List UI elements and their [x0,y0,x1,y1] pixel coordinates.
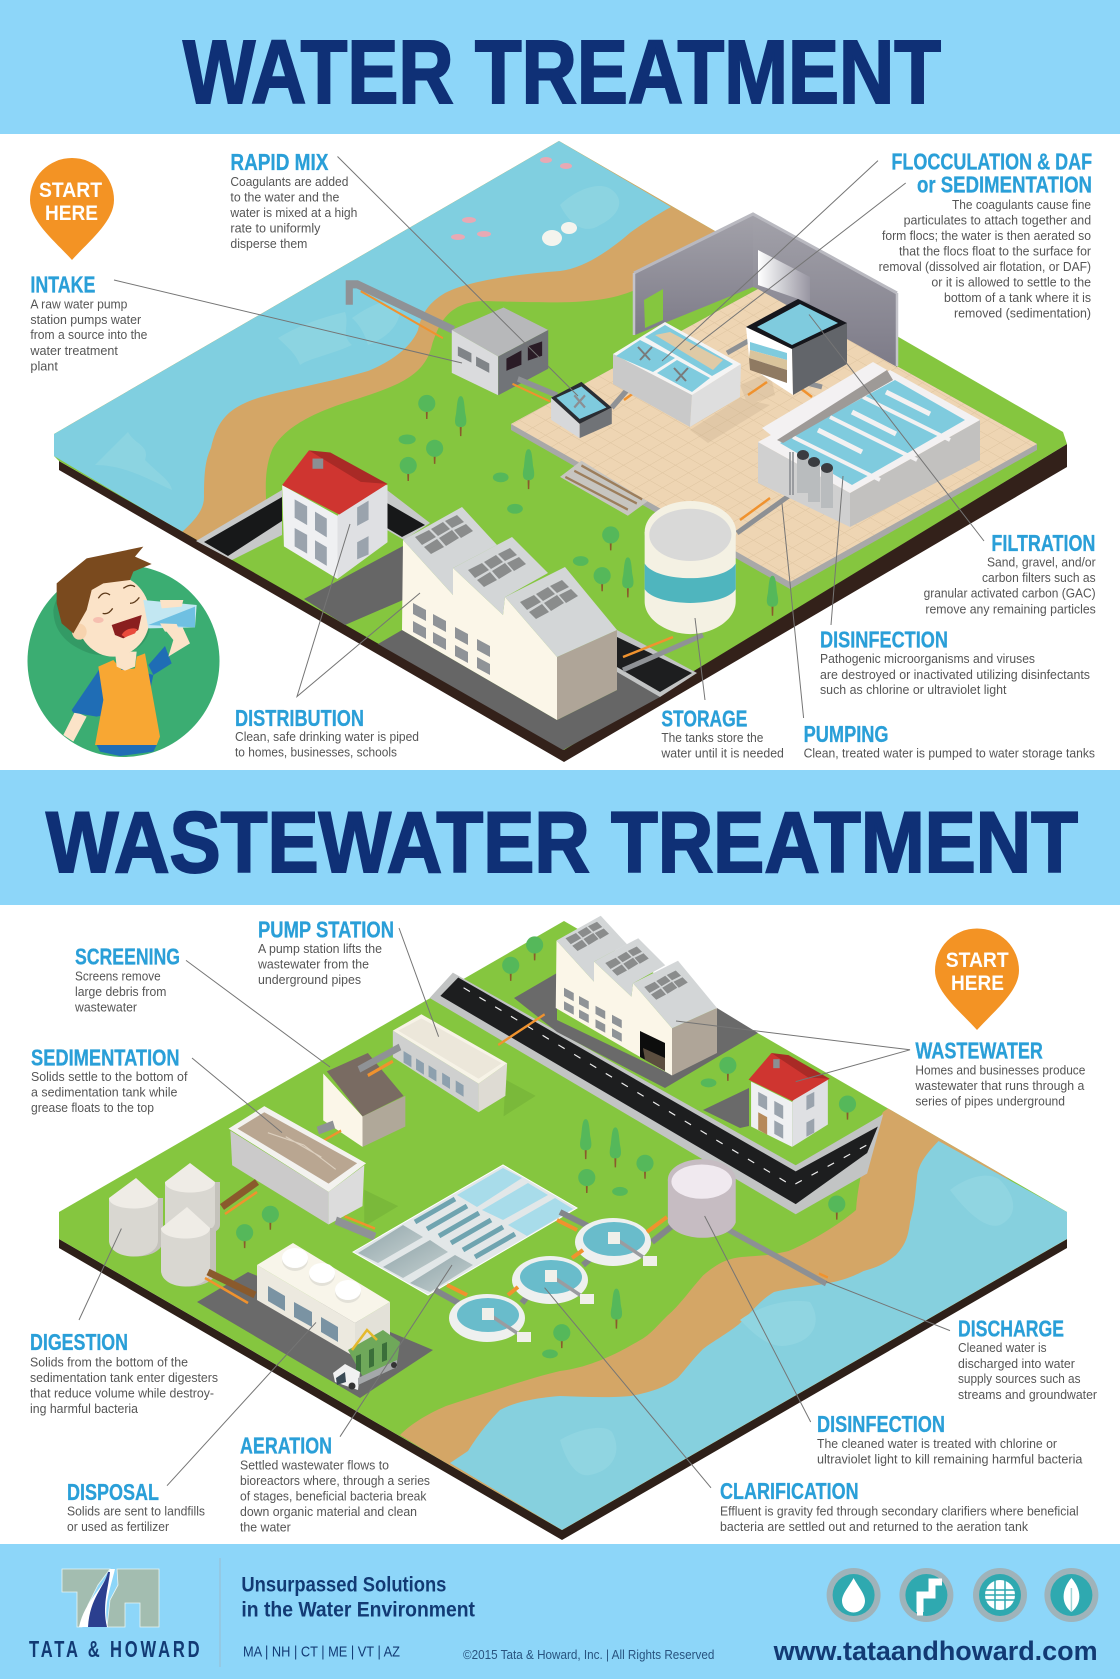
callout: aeration: the water [240,1519,291,1534]
callout: pumping: Clean, treated water is pumped to water storage tanks [804,746,1095,761]
copyright: ©2015 Tata & Howard, Inc. | All Rights Reserved [463,1647,714,1662]
callout: rapid mix: Coagulants are added [230,174,348,189]
logo: Tata and Howard: TATA & HOWARD [29,1637,200,1663]
step structure [560,461,647,516]
sludge pipes [222,1182,257,1214]
callout: rapid mix: to the water and the [230,189,339,204]
callout: discharge: streams and groundwater [958,1387,1098,1402]
plaza shadows [690,372,775,443]
arrow and pipe across road [623,635,703,670]
callout: digestion [30,1329,218,1416]
callout: disinfection (wastewater): ultraviolet light to kill remaining harmful bacteria [817,1452,1083,1467]
callout: intake: from a source into the [30,327,147,342]
rapid mix tank [551,382,630,438]
callout: discharge: discharged into water [958,1356,1075,1371]
callout: intake: water treatment [29,343,118,358]
footer divider [219,1558,221,1667]
ducks [542,222,577,246]
birds on the river [451,157,572,240]
callout: distribution: to homes, businesses, schools [235,744,397,760]
callout: flocculation and DAF or sedimentation: particulates to attach together and [904,212,1091,227]
concrete wall [634,214,897,367]
icon: water drop [827,1568,881,1622]
aeration basins [353,1165,577,1295]
callout: clarification: bacteria are settled out and returned to the aeration tank [720,1519,1028,1534]
isometric scene: water treatment plant [40,120,1080,770]
clarifiers [435,1212,677,1342]
filter building [758,362,980,527]
callout: discharge: Cleaned water is [958,1340,1047,1355]
callout: screening [74,944,180,1014]
callout: discharge: DISCHARGE [958,1315,1064,1341]
road [430,973,883,1214]
trees [236,936,558,1358]
callout: digestion: sedimentation tank enter digesters [30,1370,218,1385]
callout: disposal: Solids are sent to landfills [67,1504,205,1518]
callout: disposal: DISPOSAL [67,1479,159,1505]
callout: screening: SCREENING [75,944,180,970]
tagline [241,1574,475,1622]
callout: pump station: wastewater from the [257,957,369,972]
callout: distribution: DISTRIBUTION [235,705,364,731]
callout: discharge [958,1315,1098,1402]
ground plane with sand and river [50,915,1080,1545]
leader lines: water treatment [114,156,984,718]
callout: storage: The tanks store the [661,730,763,745]
plaza [511,289,1037,589]
office states: MA | NH | CT | ME | VT | AZ [243,1644,400,1661]
callout: aeration: down organic material and clean [240,1504,417,1519]
callout: digestion: that reduce volume while destroy- [30,1386,214,1400]
pump station building [393,1014,545,1112]
callout: sedimentation [31,1044,188,1115]
band: wastewater treatment header [0,770,1120,905]
trees [399,395,534,514]
callout: pump station: PUMP STATION [258,916,394,942]
callout: wastewater [914,1037,1085,1108]
callout: digestion: DIGESTION [30,1329,128,1355]
road and pavement [196,490,697,750]
callout: filtration [924,530,1096,616]
callout: flocculation and DAF or sedimentation: The coagulants cause fine [952,197,1091,212]
callout: rapid mix: disperse them [230,236,307,251]
callout: aeration: Settled wastewater flows to [240,1457,389,1472]
callout: disinfection (water): Pathogenic microorganisms and viruses [820,651,1035,666]
icon: leaf [1044,1568,1098,1622]
sedimentation tank [229,1106,375,1237]
callout: rapid mix: RAPID MIX [230,149,329,175]
callout: intake: station pumps water [30,312,142,327]
tagline: in the Water Environment [241,1599,475,1622]
callout: wastewater: Homes and businesses produce [915,1062,1085,1077]
callout: wastewater: wastewater that runs through a [914,1078,1085,1093]
illustration: boy drinking water [28,547,220,757]
title: water treatment: WATER TREATMENT [183,23,941,123]
callout: clarification: CLARIFICATION [720,1478,859,1504]
callout: wastewater: series of pipes underground [915,1093,1065,1108]
callout: screening: large debris from [75,984,166,999]
factory with solar roofs [402,507,617,720]
loading door [640,1031,665,1071]
screening building [318,1047,405,1147]
callout: pump station [257,916,394,987]
intake pump building [349,284,557,401]
pipes and arrows [624,340,822,533]
icon: start here pin (wastewater): HERE [951,972,1004,995]
callout: disinfection (water): are destroyed or inactivated utilizing disinfectants [820,667,1090,682]
callout: intake [29,271,147,373]
ground shadows [364,1080,536,1227]
callout: storage: water until it is needed [660,746,784,761]
icon: start here pin (water): HERE [45,202,98,225]
callout: aeration [240,1432,430,1534]
callout: aeration: AERATION [240,1432,332,1458]
callout: pump station: underground pipes [258,972,361,987]
callout: disinfection (wastewater) [817,1411,1083,1467]
callout: sedimentation: SEDIMENTATION [31,1044,180,1070]
callout: intake: INTAKE [30,271,95,297]
callout: pump station: A pump station lifts the [258,941,382,956]
icon: pipe [899,1568,953,1622]
pavement by factory [514,973,758,1128]
lot, digested solids building and truck [197,1243,433,1398]
callout: flocculation and DAF or sedimentation: that the flocs float to the surface for [899,243,1092,258]
callout: distribution: Clean, safe drinking water is piped [235,729,419,744]
callout: filtration: carbon filters such as [982,570,1096,585]
callout: filtration: remove any remaining particles [925,601,1096,616]
callout: disposal: or used as fertilizer [67,1519,170,1534]
callout: flocculation and DAF or sedimentation: form flocs; the water is then aerated so [882,228,1091,243]
storage tank [645,501,736,634]
house [282,450,387,579]
callout: flocculation and DAF or sedimentation: removed (sedimentation) [954,305,1091,320]
callout: rapid mix: rate to uniformly [230,220,321,235]
band: water treatment header [0,0,1120,134]
house [749,1053,830,1147]
icon: start here pin (wastewater) [935,928,1019,1030]
callout: flocculation and DAF or sedimentation: or it is allowed to settle to the [931,274,1091,289]
digesters [109,1163,220,1286]
callout: storage: STORAGE [661,706,747,732]
platform edge [59,1239,1067,1540]
callout: digestion: Solids from the bottom of the [30,1354,188,1370]
ground plane with sand and river [40,120,1080,770]
callout: intake: A raw water pump [30,296,127,311]
callout: flocculation and DAF or sedimentation [879,149,1092,320]
callout: disposal [67,1479,205,1534]
callout: pumping: PUMPING [804,721,889,747]
logo: Tata and Howard [29,1569,200,1663]
callout: sedimentation: a sedimentation tank while [31,1085,177,1100]
callout: screening: wastewater [74,999,138,1014]
tagline: Unsurpassed Solutions [241,1574,446,1597]
factory with solar roofs [556,916,717,1076]
callout: sedimentation: grease floats to the top [31,1100,154,1115]
callout: disinfection (wastewater): The cleaned water is treated with chlorine or [817,1436,1058,1451]
callout: discharge: supply sources such as [958,1371,1081,1386]
callout: storage [660,706,784,761]
callout: aeration: of stages, beneficial bacteria break [240,1488,427,1503]
callout: intake: plant [30,358,58,373]
callout: wastewater: WASTEWATER [915,1037,1043,1063]
icon: start here pin (wastewater): START [946,949,1009,972]
callout: distribution [235,705,419,760]
callout: rapid mix: water is mixed at a high [229,205,357,220]
callout: clarification: Effluent is gravity fed through secondary clarifiers where beneficial [720,1504,1079,1518]
pumps [790,450,833,508]
isometric scene: wastewater treatment plant [50,915,1080,1545]
icon: grate [973,1568,1027,1622]
flocculation tank [613,322,741,427]
icon: start here pin (water) [30,158,114,260]
callout: rapid mix [229,149,357,251]
callout: pumping [804,721,1095,761]
callout: digestion: ing harmful bacteria [30,1401,139,1416]
disinfection tank and outfall pipe [668,1159,828,1284]
callout: flocculation and DAF or sedimentation: bottom of a tank where it is [944,290,1091,305]
callout: disinfection (water): DISINFECTION [820,627,948,653]
icon: start here pin (water): START [39,179,102,202]
leader lines: wastewater treatment [79,928,950,1488]
callout: aeration: bioreactors where, through a series [240,1473,430,1488]
platform edge [59,444,1067,762]
callout: filtration: granular activated carbon (GAC) [924,586,1096,601]
website: www.tataandhoward.com [773,1636,1098,1666]
callout: sedimentation: Solids settle to the bottom of [31,1069,188,1084]
callout: clarification [720,1478,1079,1534]
DAF tank cutaway [746,299,847,395]
callout: screening: Screens remove [75,968,161,983]
callout: disinfection (water) [820,627,1090,697]
callout: disinfection (wastewater): DISINFECTION [817,1411,945,1437]
callout: disinfection (water): such as chlorine or ultraviolet light [820,682,1007,697]
callout: filtration: Sand, gravel, and/or [987,555,1096,570]
callout: flocculation and DAF or sedimentation: removal (dissolved air flotation, or DAF) [879,259,1091,274]
footer band [0,1544,1120,1679]
